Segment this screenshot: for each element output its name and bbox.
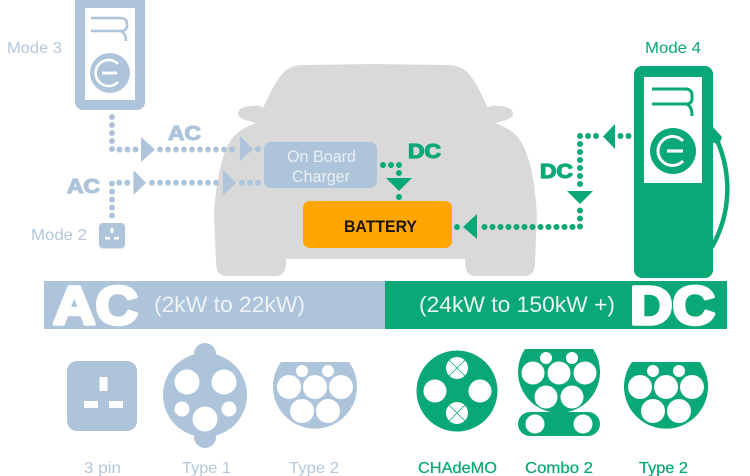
connector: 3 pin bbox=[67, 361, 137, 431]
connector: Type 1 bbox=[163, 343, 247, 448]
on board charger box: Charger bbox=[292, 168, 350, 186]
arrow: AC from Mode 3 to on-board charger bbox=[112, 117, 261, 162]
label: DC inner: DC bbox=[408, 141, 441, 163]
battery: BATTERY bbox=[344, 217, 418, 236]
arrow: DC from charger to battery bbox=[383, 165, 412, 200]
label: AC upper: AC bbox=[168, 123, 201, 145]
DC power bar: DC bbox=[630, 276, 715, 336]
AC power bar: AC bbox=[53, 276, 138, 336]
label: AC lower: AC bbox=[67, 176, 100, 198]
Mode 4 DC charger bbox=[634, 66, 727, 278]
AC power bar bbox=[44, 276, 385, 336]
arrow: DC from Mode 4 to battery bbox=[454, 124, 628, 239]
arrow: AC from Mode 2 to on-board charger bbox=[112, 170, 258, 216]
AC power bar: (2kW to 22kW) bbox=[154, 292, 305, 317]
on board charger box: On Board bbox=[287, 148, 356, 166]
DC power bar bbox=[385, 276, 727, 336]
car silhouette bbox=[214, 64, 537, 276]
connector: Type 2 DC bbox=[624, 362, 708, 429]
label: Mode 2: Mode 2 bbox=[31, 227, 87, 244]
battery bbox=[303, 201, 452, 248]
DC power bar: (24kW to 150kW +) bbox=[419, 292, 615, 317]
connector: CHAdeMO bbox=[416, 350, 498, 432]
icon: Mode 2 wall socket bbox=[99, 223, 125, 248]
connector: Type 2 AC bbox=[273, 362, 357, 429]
connector: Combo 2 bbox=[518, 349, 600, 436]
label: Mode 3: Mode 3 bbox=[7, 40, 62, 57]
label: DC outer: DC bbox=[540, 161, 573, 183]
Mode 3 AC charger bbox=[75, 0, 145, 110]
label: Mode 4: Mode 4 bbox=[645, 40, 701, 57]
on board charger box bbox=[264, 142, 377, 188]
